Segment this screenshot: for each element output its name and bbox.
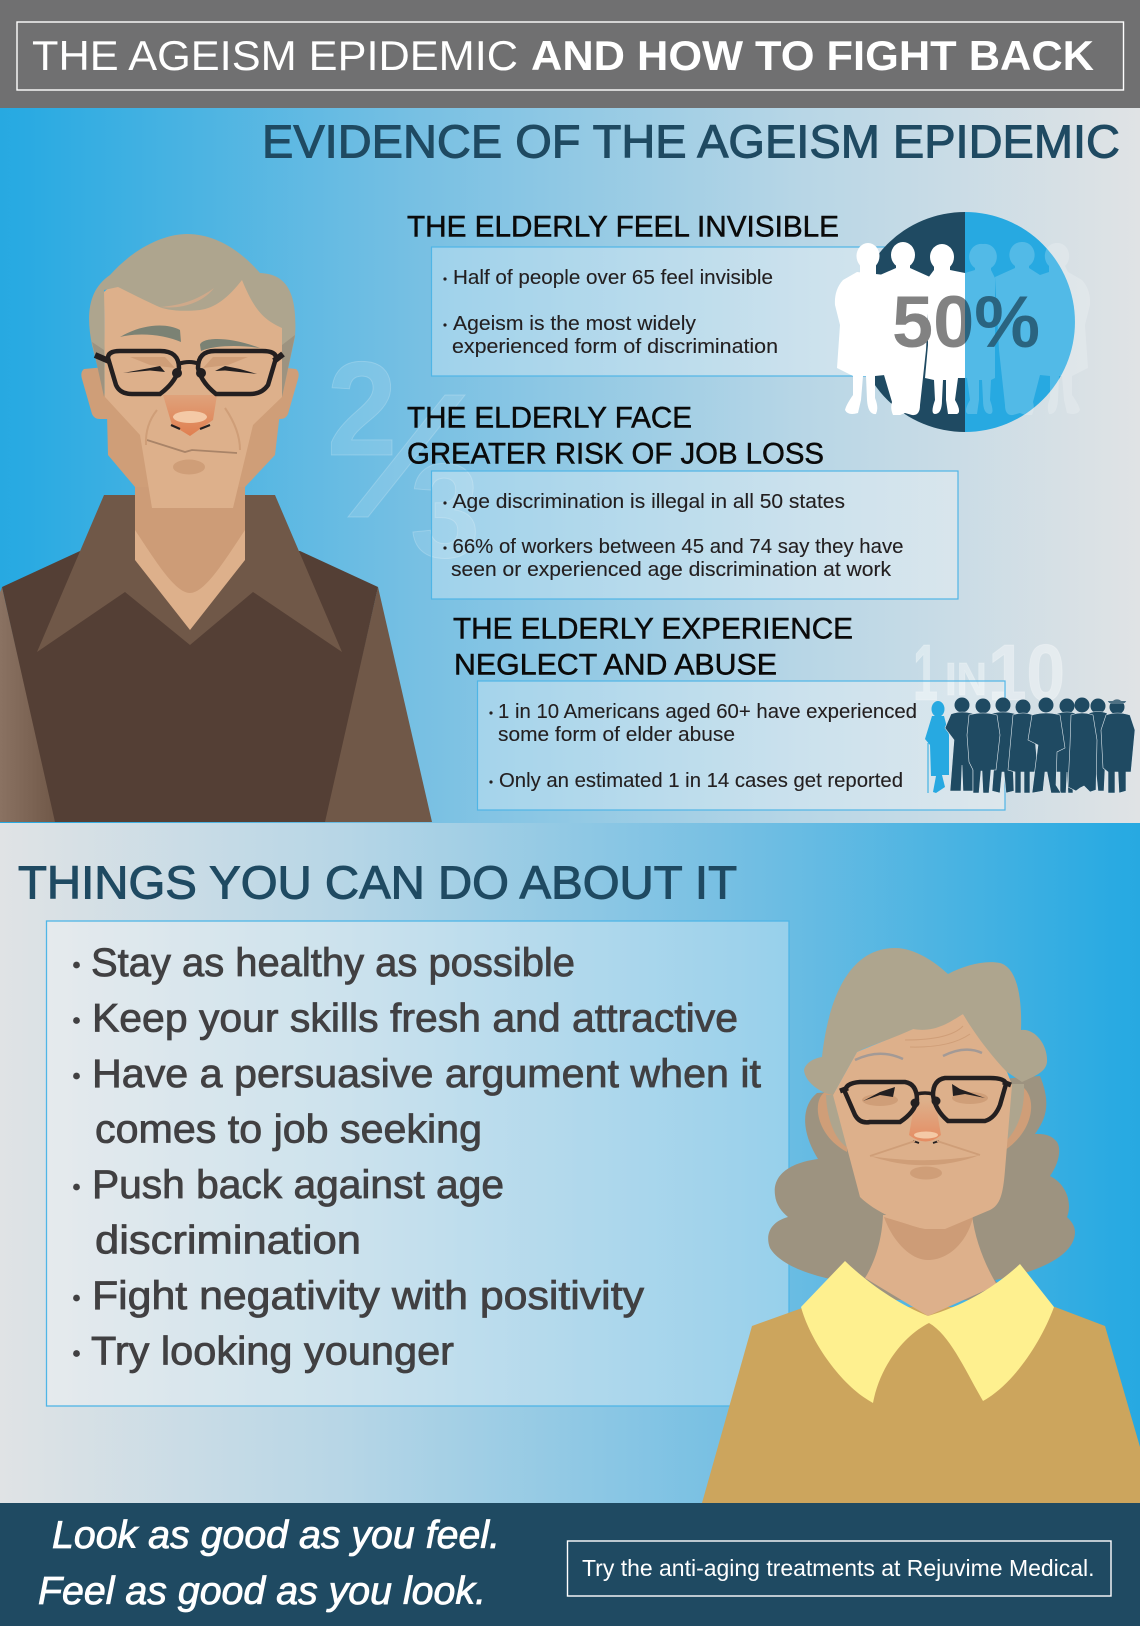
bullet text: 66% of workers between 45 and 74 say they have [452, 535, 904, 558]
heading: THE ELDERLY FEEL INVISIBLE [407, 210, 839, 244]
ghost text 1 in 10 [913, 628, 1065, 717]
panel: neglect and abuse [453, 612, 1005, 810]
text box [478, 681, 1005, 810]
ghost fraction two thirds: 3 [410, 437, 480, 586]
chart: 50 percent pie [835, 212, 1090, 432]
heading: things you can do: THINGS YOU CAN DO ABOUT IT [18, 856, 737, 908]
silhouettes: faded group [965, 242, 1090, 415]
panel: things you can do background [0, 823, 1140, 1503]
heading [453, 612, 853, 682]
heading: THE ELDERLY EXPERIENCE [453, 612, 853, 646]
bullet list: Try looking younger [91, 1330, 454, 1374]
footer band [0, 1503, 1140, 1626]
bullet text: Only an estimated 1 in 14 cases get reported [499, 769, 903, 792]
header band [0, 0, 1140, 108]
bullet text: seen or experienced age discrimination at work [451, 558, 892, 581]
bullet list: Push back against age [92, 1163, 504, 1207]
heading [407, 402, 824, 470]
panel: job loss [407, 402, 958, 599]
illustration: elderly woman [702, 948, 1140, 1503]
heading: GREATER RISK OF JOB LOSS [407, 438, 824, 470]
ghost text 1 in 10: 1 [913, 628, 938, 717]
panel: evidence background [0, 108, 1140, 823]
bullet text: 1 in 10 Americans aged 60+ have experienced [498, 700, 917, 723]
call to action box [568, 1541, 1111, 1596]
ghost text 1 in 10: 10 [988, 628, 1065, 717]
bullet list: discrimination [95, 1218, 361, 1262]
bullet text: Age discrimination is illegal in all 50 states [452, 490, 845, 513]
silhouettes: white group [835, 242, 965, 415]
illustration: elderly man [0, 234, 432, 822]
text box [432, 471, 958, 599]
bullet list: comes to job seeking [95, 1108, 482, 1152]
bullet list: Fight negativity with positivity [92, 1274, 644, 1318]
slogan: Feel as good as you look. [38, 1570, 486, 1613]
bullet text: experienced form of discrimination [452, 335, 778, 358]
ghost fraction two thirds: 2 [327, 335, 397, 484]
heading: THE ELDERLY FACE [407, 402, 692, 434]
heading: evidence: EVIDENCE OF THE AGEISM EPIDEMIC [262, 116, 1120, 168]
value: 50% [892, 282, 1040, 363]
bullet text: Half of people over 65 feel invisible [453, 266, 773, 289]
panel: elderly feel invisible [407, 210, 884, 376]
bullet text [443, 266, 778, 358]
bullet list: Have a persuasive argument when it [92, 1052, 761, 1096]
call to action box: Try the anti-aging treatments at Rejuvime Medical. [582, 1555, 1094, 1581]
bullet text: some form of elder abuse [498, 723, 735, 746]
slogan: Look as good as you feel. [52, 1514, 500, 1557]
text box [432, 247, 884, 376]
list box [46, 921, 789, 1406]
bullet text [443, 490, 904, 581]
bullet list [73, 941, 761, 1374]
slogan [38, 1514, 500, 1613]
icon: crowd of ten people [925, 698, 1135, 793]
ghost fraction two thirds [327, 335, 480, 586]
title: THE AGEISM EPIDEMIC [32, 32, 518, 79]
title bold part: AND HOW TO FIGHT BACK [531, 32, 1094, 79]
bullet list: Stay as healthy as possible [91, 941, 575, 985]
ghost text 1 in 10: IN [945, 653, 987, 705]
bullet list: Keep your skills fresh and attractive [92, 996, 738, 1040]
panel: action list [46, 921, 789, 1406]
title frame [17, 22, 1124, 90]
heading: NEGLECT AND ABUSE [454, 648, 777, 682]
bullet text [489, 700, 917, 792]
bullet text: Ageism is the most widely [453, 312, 697, 335]
